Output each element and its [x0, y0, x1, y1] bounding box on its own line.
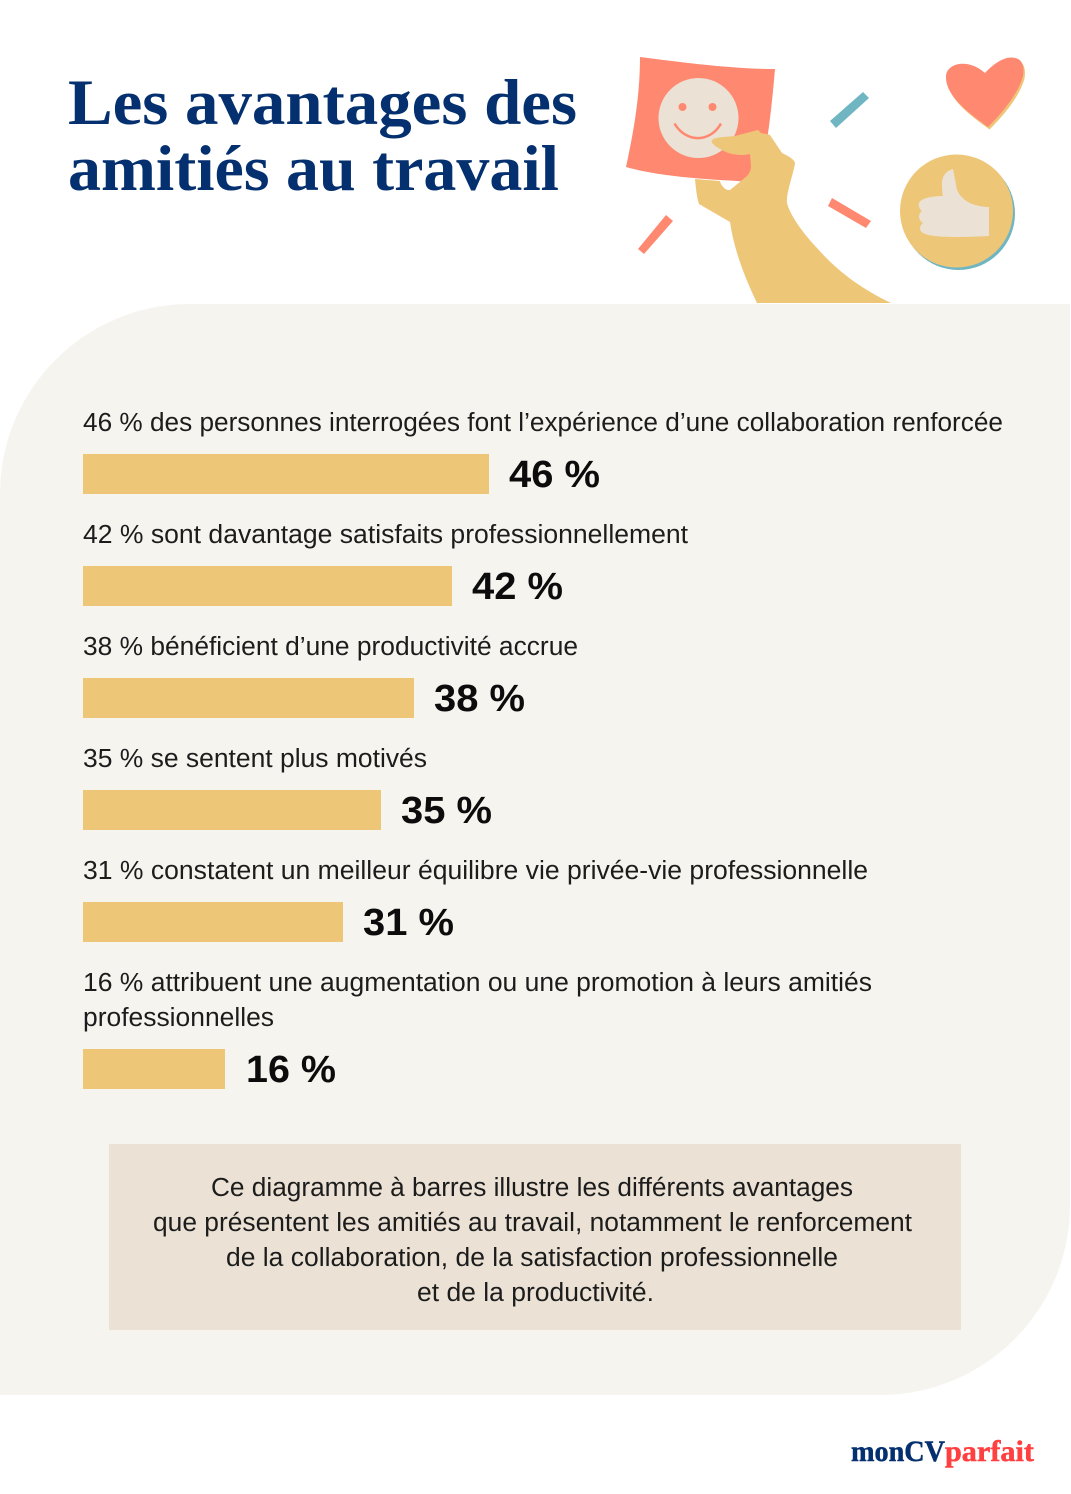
icon: smiley card	[626, 57, 775, 182]
callout: chart description: que présentent les amitiés au travail, notamment le renforcement	[153, 1209, 912, 1237]
illustration: hand holding smiley, heart, thumbs up	[626, 57, 1025, 303]
bar row 5: 31 % constatent un meilleur équilibre vie privée-vie professionnelle	[83, 857, 868, 885]
callout: chart description: Ce diagramme à barres illustre les différents avantages	[211, 1174, 853, 1202]
title: amitiés au travail	[68, 133, 559, 205]
icon: thumbs up badge	[900, 154, 1015, 270]
title	[68, 67, 577, 205]
bar row 6: professionnelles	[83, 1004, 274, 1032]
logo: parfait	[945, 1435, 1034, 1468]
callout: chart description: de la collaboration, de la satisfaction professionnelle	[226, 1244, 838, 1272]
bar row 2: 42 % sont davantage satisfaits professionnellement	[83, 521, 688, 549]
bar row 3: 38 % bénéficient d’une productivité accrue	[83, 633, 578, 661]
bar row 5	[83, 857, 868, 944]
bar row 1	[83, 409, 1003, 496]
bar row 6: 16 %	[246, 1049, 336, 1091]
icon: heart	[946, 57, 1025, 130]
bar row 1: 46 %	[509, 454, 600, 496]
bar row 6: 16 % attribuent une augmentation ou une promotion à leurs amitiés	[83, 969, 872, 997]
icon: hand and arm	[695, 130, 891, 303]
callout: chart description	[109, 1144, 961, 1330]
bar row 4	[83, 745, 492, 832]
logo	[851, 1435, 1034, 1468]
bar row 4: 35 % se sentent plus motivés	[83, 745, 427, 773]
logo: monCV	[851, 1435, 945, 1468]
title: Les avantages des	[68, 67, 577, 139]
bar row 3	[83, 633, 578, 720]
icon: confetti bars	[638, 92, 871, 254]
bar row 1: 46 % des personnes interrogées font l’expérience d’une collaboration renforcée	[83, 409, 1003, 437]
bar row 2	[83, 521, 688, 608]
bar row 5: 31 %	[363, 902, 454, 944]
bar row 3: 38 %	[434, 678, 525, 720]
bar row 2: 42 %	[472, 566, 563, 608]
bar row 6	[83, 969, 872, 1091]
panel: background	[0, 304, 1070, 1395]
callout: chart description: et de la productivité.	[417, 1279, 654, 1307]
bar row 4: 35 %	[401, 790, 492, 832]
